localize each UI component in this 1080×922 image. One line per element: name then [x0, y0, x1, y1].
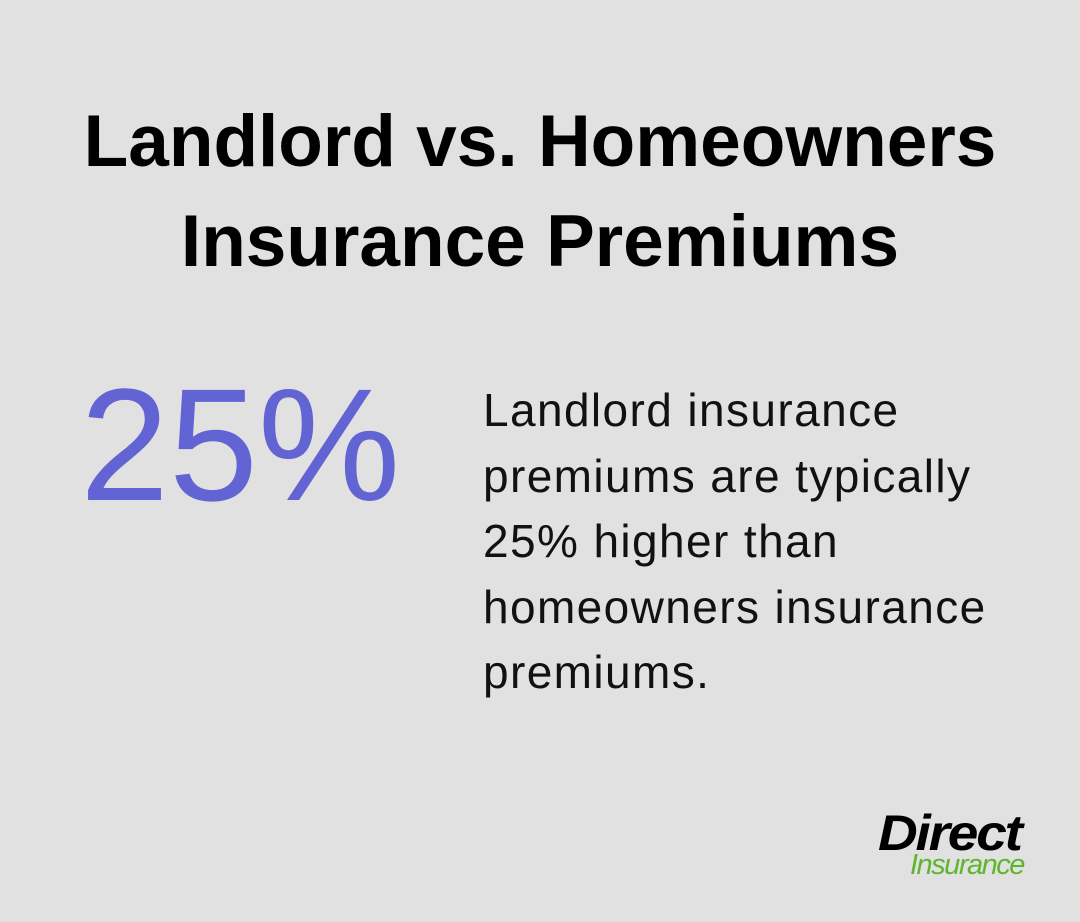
description text: homeowners insurance: [483, 580, 987, 632]
title: Landlord vs. Homeowners: [84, 101, 996, 182]
big stat: 25%: [80, 355, 400, 534]
title: Insurance Premiums: [181, 201, 899, 282]
description text: 25% higher than: [483, 515, 839, 567]
description text: premiums.: [483, 646, 710, 698]
title: [84, 101, 996, 282]
logo: Insurance: [910, 849, 1024, 881]
description text: [483, 384, 987, 698]
description text: Landlord insurance: [483, 384, 899, 436]
description text: premiums are typically: [483, 450, 971, 502]
logo: Direct: [878, 805, 1021, 861]
